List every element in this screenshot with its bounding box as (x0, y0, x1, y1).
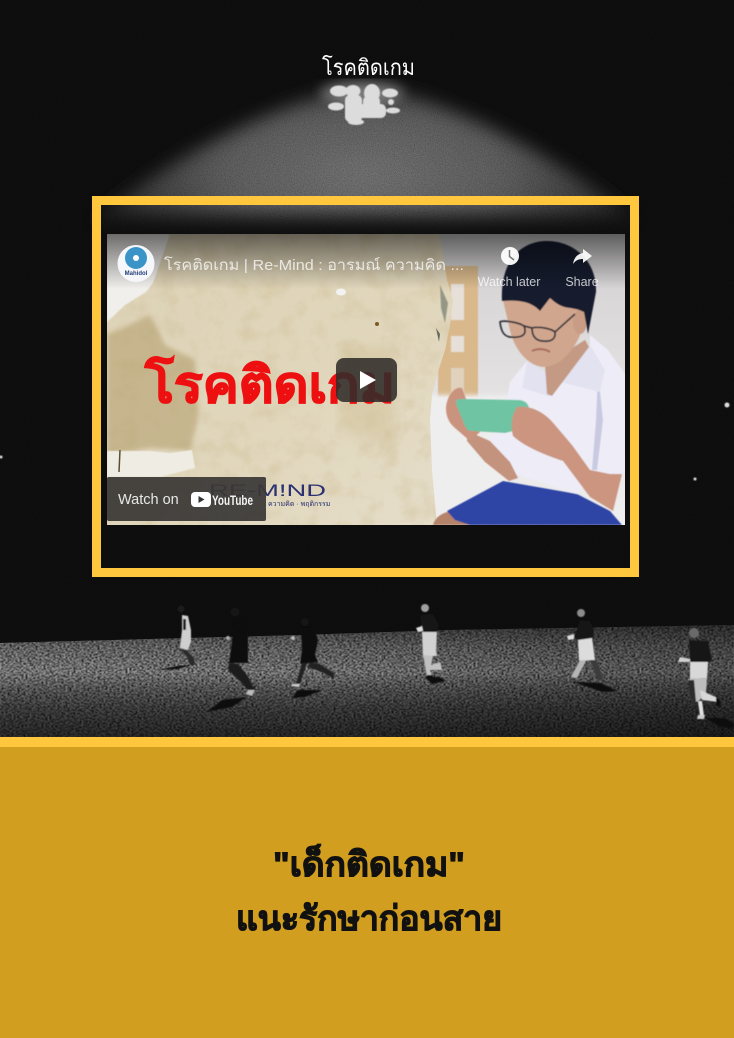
re-mind logo: ความคิด · พฤติกรรม (268, 500, 330, 508)
football players (178, 604, 721, 719)
distant lights (0, 402, 730, 480)
video thumbnail (107, 234, 625, 525)
player 3 (291, 618, 334, 687)
grass field (0, 620, 734, 737)
hair (502, 241, 596, 334)
right hand and arm (512, 407, 622, 511)
room background (425, 234, 625, 525)
thumbnail headline: โรคติดเกม (144, 355, 395, 413)
channel logo: Mahidol (125, 271, 148, 277)
player shadows (157, 665, 734, 728)
phone (456, 399, 535, 433)
shirt shading (592, 391, 604, 470)
player 5 (567, 609, 603, 680)
watch later button (478, 247, 540, 289)
watch on youtube badge (107, 477, 266, 521)
bottom panel (0, 747, 734, 1038)
cracked plaster wall (107, 234, 457, 525)
watch on youtube badge: YouTube (212, 492, 253, 508)
top shade (107, 234, 625, 289)
player 4 (416, 604, 442, 680)
ear (573, 310, 587, 334)
share button (566, 249, 598, 286)
shirt (488, 335, 625, 494)
face (503, 295, 582, 367)
neck (545, 340, 589, 396)
title: โรคติดเกม (322, 55, 415, 80)
player 6 (678, 628, 721, 719)
share button: Share (565, 275, 599, 289)
mouth (532, 349, 550, 352)
re-mind logo: RE-M!ND (209, 481, 326, 500)
watch later button: Watch later (478, 275, 540, 289)
boy playing on phone (433, 241, 625, 525)
floodlight glow (0, 0, 734, 640)
headline: "เด็กติดเกม" (273, 843, 465, 884)
leg (432, 511, 470, 525)
yellow divider band (0, 737, 734, 748)
player 1 (178, 606, 195, 665)
headline (236, 843, 502, 938)
night sky background (0, 0, 734, 740)
play button (336, 358, 397, 402)
video frame (96, 200, 634, 572)
headline: แนะรักษาก่อนสาย (236, 900, 502, 938)
watch on youtube badge: Watch on (118, 492, 179, 508)
channel logo (118, 245, 154, 282)
glasses (500, 314, 575, 341)
player 2 (226, 608, 255, 696)
collar (522, 345, 605, 397)
floodlight lamps (320, 81, 404, 125)
video title: โรคติดเกม | Re-Mind : อารมณ์ ความคิด ... (164, 256, 464, 274)
shorts (447, 481, 622, 525)
re-mind logo (212, 484, 330, 508)
left hand (446, 388, 480, 441)
left arm (467, 431, 518, 481)
